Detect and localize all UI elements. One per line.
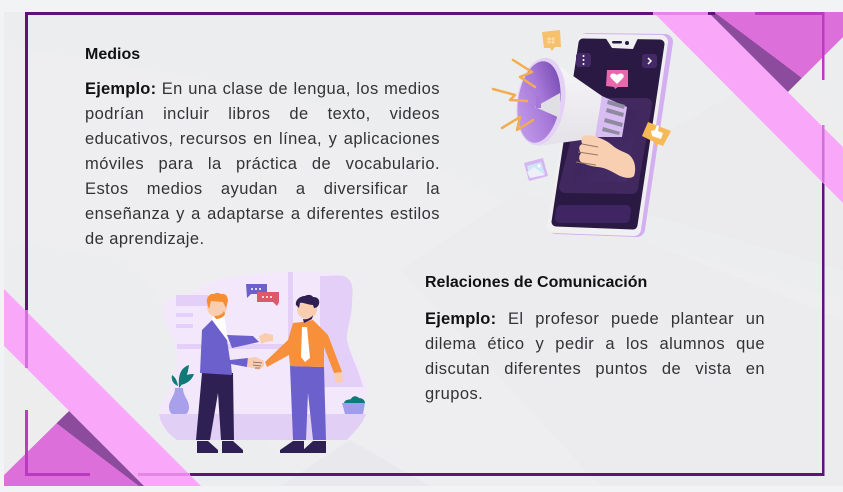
text block: Relaciones example: dilema ético y pedir a los alumnos que bbox=[425, 335, 765, 353]
illustration: handshake bbox=[159, 272, 367, 453]
handshake hands bbox=[247, 357, 264, 370]
top right corner decoration bbox=[653, 12, 843, 203]
icon: thumbs up badge bbox=[642, 122, 671, 147]
text block: Medios example: móviles para la práctica de vocabulario. bbox=[85, 155, 440, 173]
text block: Relaciones example: Ejemplo: El profesor puede plantear un bbox=[425, 310, 765, 328]
speech bubbles bbox=[246, 284, 279, 306]
text block: Medios example: enseñanza y a adaptarse a diferentes estilos bbox=[85, 205, 440, 223]
hand bbox=[576, 135, 635, 178]
text block: Relaciones example: grupos. bbox=[425, 385, 483, 403]
office background shape bbox=[159, 272, 367, 440]
text block: Medios example: educativos, recursos en línea, y aplicaciones bbox=[85, 130, 440, 148]
icon: photo bbox=[524, 158, 548, 181]
vase and plant bbox=[169, 365, 194, 414]
text block: Relaciones example bbox=[425, 310, 765, 403]
left man bbox=[196, 293, 273, 453]
illustration: phone with megaphone bbox=[493, 30, 671, 229]
bottom left corner decoration bbox=[4, 289, 201, 486]
heading: Medios: Medios bbox=[85, 46, 140, 63]
phone body bbox=[554, 37, 665, 229]
phone screen panels bbox=[560, 104, 646, 218]
phone buttons bbox=[576, 53, 657, 68]
text block: Medios example: Ejemplo: En una clase de lengua, los medios bbox=[85, 80, 440, 98]
text block: Relaciones example: discutan diferentes puntos de vista en bbox=[425, 360, 765, 378]
text block: Medios example: Estos medios ayudan a diversificar la bbox=[85, 180, 440, 198]
heading: Relaciones de Comunicación: Relaciones de Comunicación bbox=[425, 274, 647, 291]
text block: Medios example: de aprendizaje. bbox=[85, 230, 205, 248]
plant pot bbox=[342, 396, 365, 414]
megaphone bbox=[511, 55, 627, 148]
icon: heart badge bbox=[606, 70, 628, 89]
icon: chat bubble bbox=[542, 30, 561, 51]
text block: Medios example bbox=[85, 80, 440, 248]
text block: Medios example: podrían incluir libros de texto, videos bbox=[85, 105, 440, 123]
megaphone sound bolts bbox=[493, 60, 535, 130]
right man bbox=[265, 295, 343, 453]
